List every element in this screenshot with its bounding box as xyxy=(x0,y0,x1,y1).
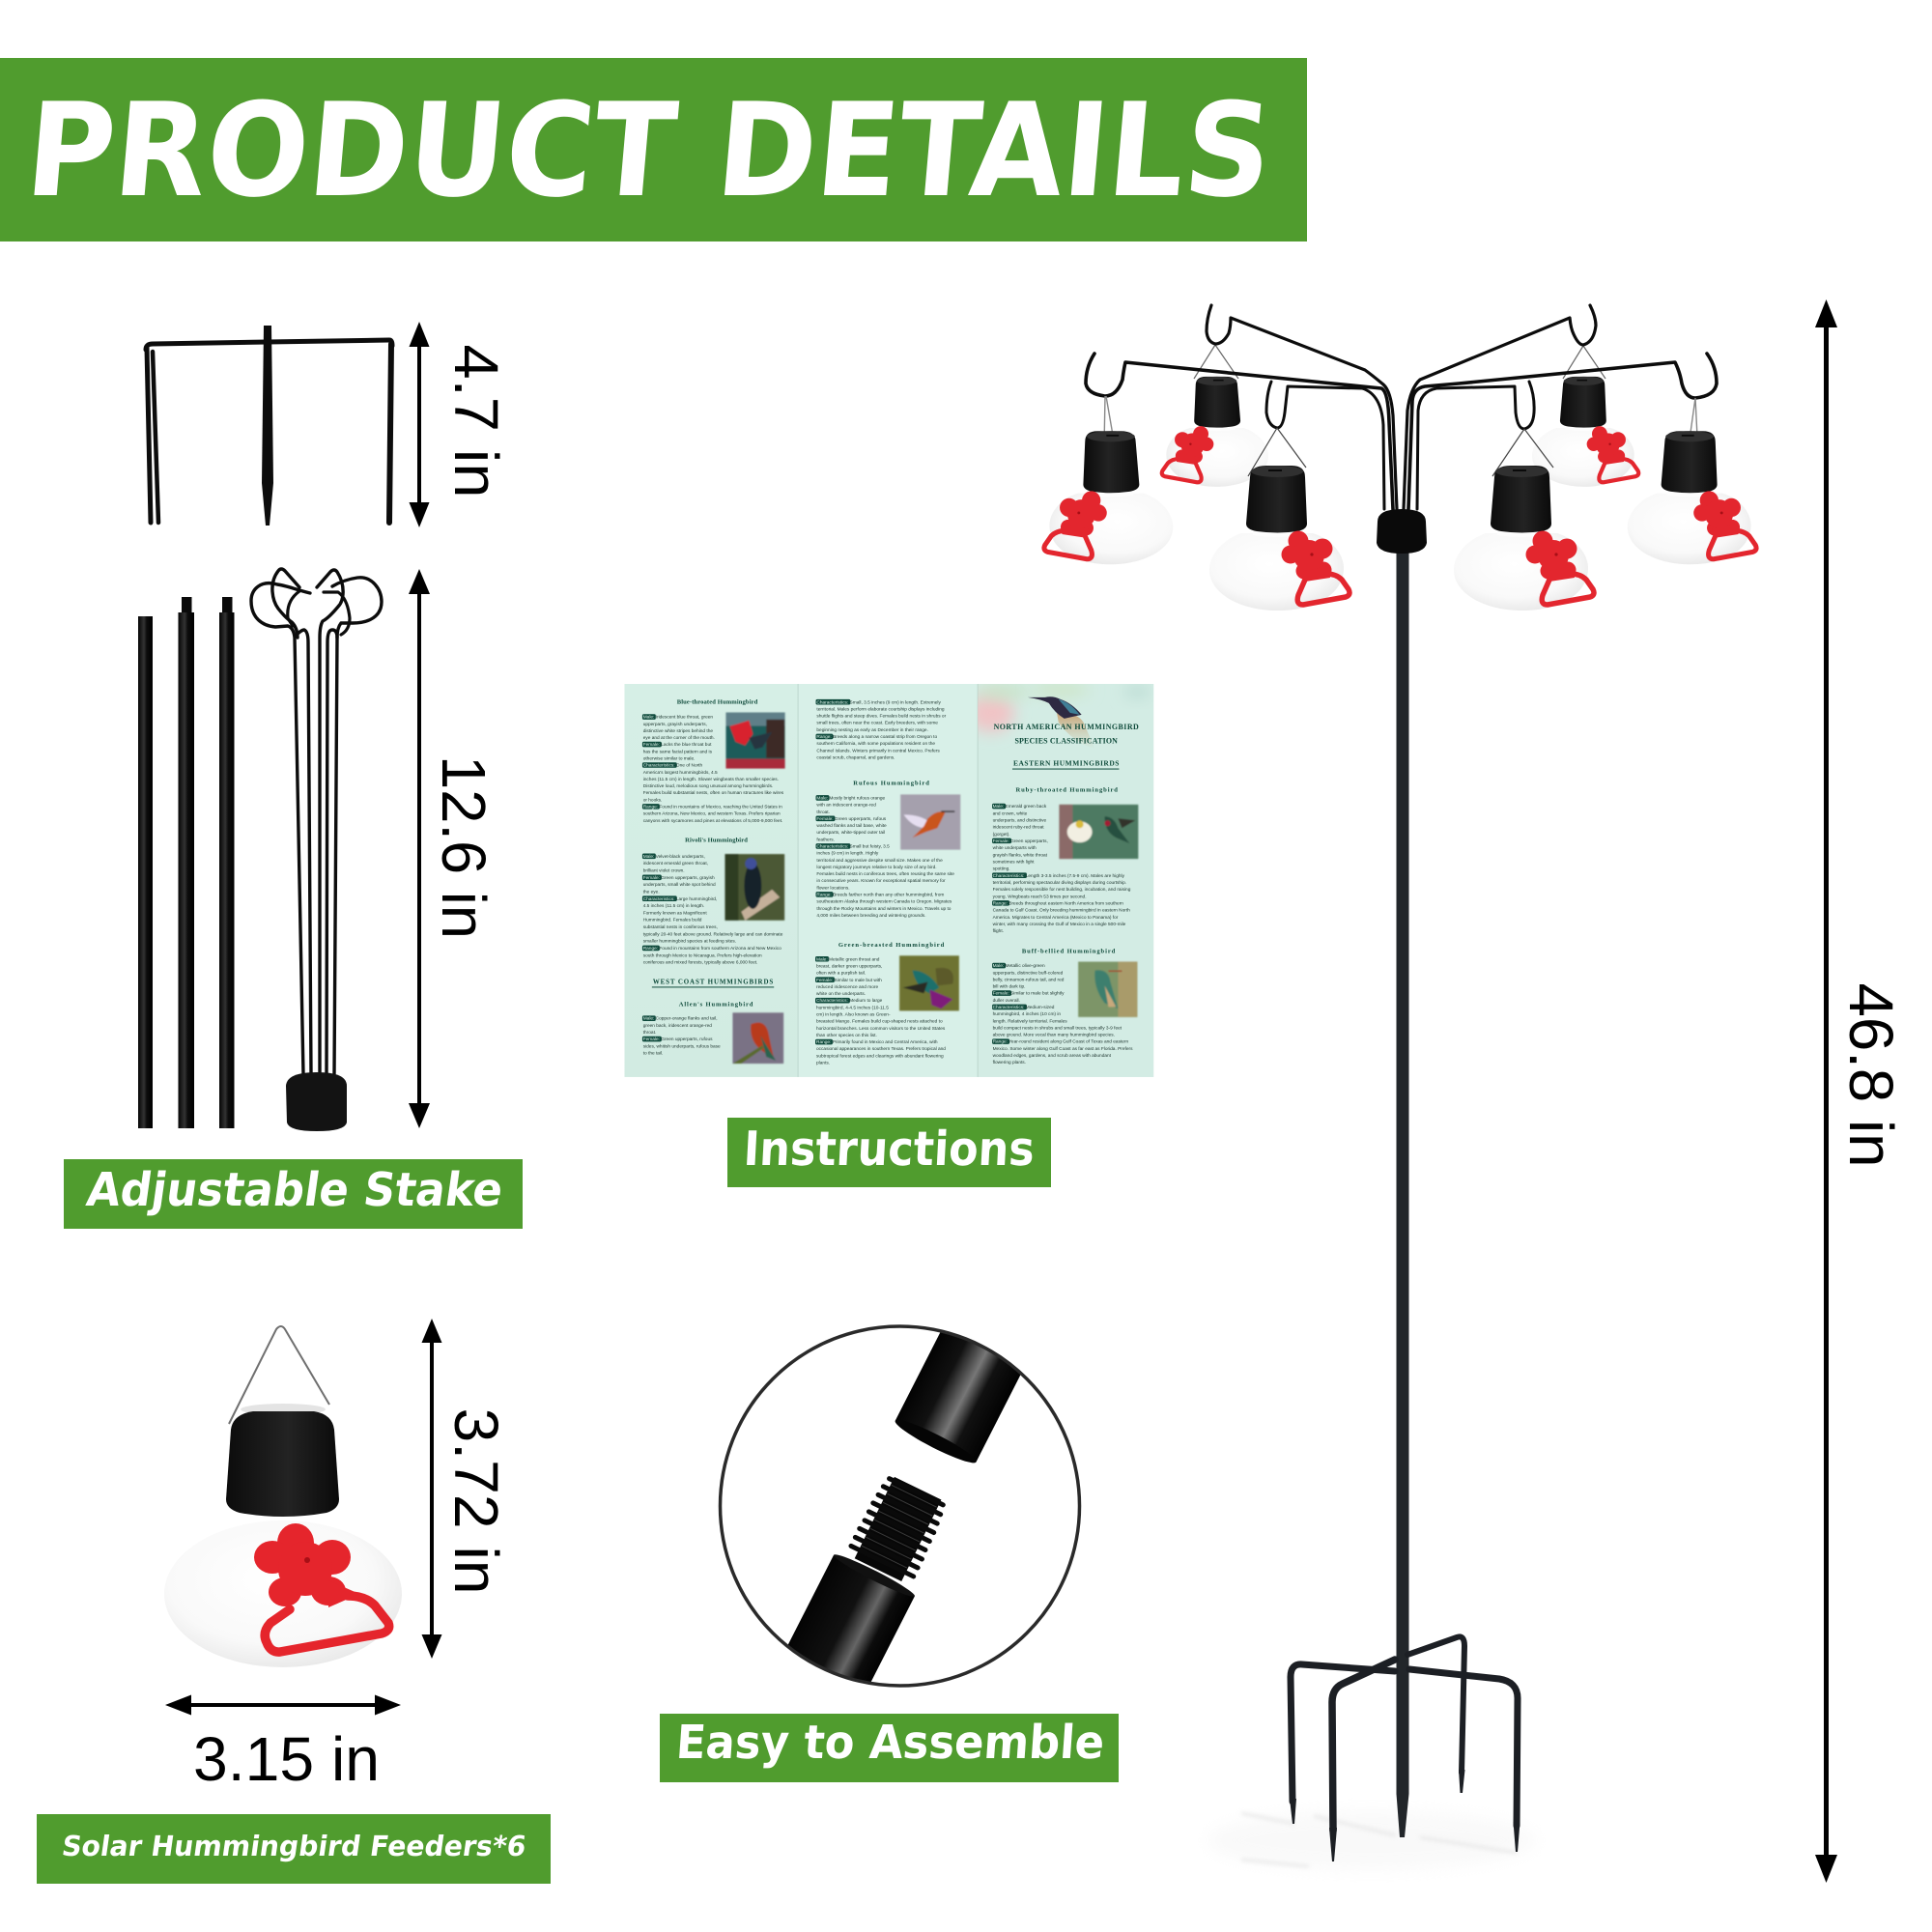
brochure body text: left panel: coniferous and mixed forests, typically above 6,000 feet. xyxy=(643,960,757,966)
brochure body text: right panel: spotting. xyxy=(993,867,1010,872)
brochure body text: middle panel: Female: Green upperparts, rufous xyxy=(816,817,886,822)
dimension label: 46.8 in: 46.8 in xyxy=(1836,983,1906,1167)
title banner: PRODUCT DETAILS xyxy=(20,74,1278,226)
brochure body text: left panel: Characteristics: Large hummingbird, xyxy=(643,897,717,902)
hanger wire xyxy=(229,1326,329,1424)
pronged base xyxy=(1290,1636,1520,1861)
brochure body text: right panel: hummingbird, 4 inches (10 cm) in xyxy=(993,1011,1061,1017)
brochure body text: right panel: Characteristics: Length 3-3.5 inches (7.5-9 cm). Males are highly xyxy=(993,874,1124,879)
brochure body text: right panel: America. Migrates to Central America (Mexico to Panama) for xyxy=(993,915,1119,921)
brochure body text: middle panel: Range: Primarily found in Mexico and Central America, with xyxy=(816,1040,938,1045)
brochure body text: left panel: Females build substantial nests, often on human structures like wires xyxy=(643,790,784,796)
dimension arrow: 3.72 in xyxy=(421,1319,442,1659)
brochure body text: left panel: Male: Copper-orange flanks and tail, xyxy=(643,1017,718,1022)
hub connector xyxy=(1377,509,1427,554)
brochure body text: right panel: woodland edges, gardens, and scrub areas with abundant xyxy=(993,1053,1112,1059)
brochure body text: middle panel: longest migratory journeys relative to body size of any bird. xyxy=(816,865,937,870)
brochure body text: middle panel: than other species on this list. xyxy=(816,1033,877,1038)
brochure body text: middle panel: territorial. Males perform elaborate courtship displays including xyxy=(816,706,945,712)
brochure body text: left panel: Female: Green upperparts, grayish xyxy=(643,876,715,881)
brochure body text: right panel: flowering plants. xyxy=(993,1060,1026,1065)
brochure body text: left panel: southern Arizona, New Mexico, and western Texas. Prefers riparian xyxy=(643,811,781,817)
brochure body text: middle panel: in consecutive years. Known for exceptional spatial memory for xyxy=(816,878,946,884)
hanger arms xyxy=(1086,305,1717,509)
brochure body text: left panel: iridescent emerald green throat, xyxy=(643,861,708,867)
feeding port flower xyxy=(254,1523,359,1607)
feeding port handle xyxy=(265,1596,389,1652)
brochure body text: middle panel: feathers. xyxy=(816,837,835,842)
brochure headings xyxy=(652,699,1139,1008)
brochure body text: left panel: Range: Found in mountains of Mexico, reaching the United States in xyxy=(643,805,782,810)
brochure body text: right panel: length. Relatively territorial. Females xyxy=(993,1018,1067,1024)
photo: Rivoli's hummingbird xyxy=(724,854,784,921)
brochure headings: Allen's Hummingbird xyxy=(679,1001,753,1008)
brochure headings: Buff-bellied Hummingbird xyxy=(1022,949,1116,955)
brochure body text: left panel: throat. xyxy=(643,1030,656,1036)
brochure headings: EASTERN HUMMINGBIRDS xyxy=(1013,759,1119,768)
label: Adjustable Stake: Adjustable Stake xyxy=(83,1163,506,1217)
feeder body xyxy=(164,1520,402,1667)
brochure body text: right panel: duller overall. xyxy=(993,998,1020,1004)
brochure body text: middle panel: Range: Breeds along a narrow coastal strip from Oregon to xyxy=(816,735,937,740)
brochure body text: left panel: or hooks. xyxy=(643,797,662,803)
brochure body text: right panel: and crown, white xyxy=(993,810,1028,816)
dimension label: 4.7 in: 4.7 in xyxy=(441,344,511,498)
photo: blue-throated hummingbird xyxy=(725,713,785,769)
brochure body text: right panel: upperparts, distinctive buff-colored xyxy=(993,970,1064,976)
brochure headings: Blue-throated Hummingbird xyxy=(677,699,758,706)
brochure body text: left panel: to the tail. xyxy=(643,1050,663,1056)
joined pole segments xyxy=(788,1333,1020,1682)
brochure body text: right panel: Mexico. Some winter along Gulf Coast as far east as Florida. Prefers xyxy=(993,1046,1133,1052)
dimension label: 3.15 in: 3.15 in xyxy=(193,1724,380,1794)
brochure body text: left panel: America's largest hummingbirds, 4.5 xyxy=(643,770,718,776)
brochure body text: right panel: belly, cinnamon-rufous tail, and red xyxy=(993,977,1065,982)
brochure body text: right panel: young. Wingbeats reach 53 times per second. xyxy=(993,894,1087,899)
brochure body text: middle panel: Female: Similar to male but with xyxy=(816,979,882,983)
brochure body text: right panel: sometimes with light xyxy=(993,859,1035,865)
brochure body text: middle panel: cm) in length. Also known as Green- xyxy=(816,1012,891,1018)
brochure body text: left panel: smaller hummingbird species at feeding sites. xyxy=(643,939,736,945)
brochure body text: middle panel: reduced iridescence and more xyxy=(816,984,878,990)
brochure body text: right panel: Female: Similar to male but slightly xyxy=(993,992,1064,997)
brochure body text: right panel: Characteristics: Medium-sized xyxy=(993,1006,1054,1010)
label: Solar Hummingbird Feeders*6 xyxy=(37,1814,551,1884)
brochure body text: left panel: underparts, small white spot behind xyxy=(643,882,716,888)
brochure body text: middle panel: Characteristics: Medium to large xyxy=(816,999,882,1004)
brochure body text: middle panel: throat. xyxy=(816,810,830,815)
brochure body text: right panel: Female: Green upperparts, xyxy=(993,839,1048,844)
brochure body text: middle panel: Range: Breeds farther north than any other hummingbird, from xyxy=(816,894,944,898)
brochure body text: middle panel: white on the underparts. xyxy=(816,991,866,997)
brochure body text: middle panel: inches (9 cm) in length. Highly xyxy=(816,851,879,857)
photo: Allen's hummingbird xyxy=(732,1012,783,1064)
brochure body text: middle panel: underparts, white-tipped outer tail xyxy=(816,830,885,836)
brochure body text: left panel: Range: Found in mountains from southern Arizona and New Mexico xyxy=(643,947,781,952)
brochure body text: middle panel: breast, darker green upperparts, xyxy=(816,964,882,970)
brochure body text: right panel xyxy=(993,804,1133,1065)
brochure body text: left panel: distinctive white stripes behind the xyxy=(643,728,713,734)
brochure body text: left panel: green back, iridescent orange-red xyxy=(643,1023,712,1029)
main pole xyxy=(1397,553,1408,1837)
brochure body text: left panel: canyons with sycamores and pines at elevations of 5,000-9,000 feet. xyxy=(643,818,782,824)
brochure headings: Rivoli's Hummingbird xyxy=(685,837,748,843)
brochure body text: middle panel: shuttle flights and steep dives. Females build nests in shrubs or xyxy=(816,714,947,720)
brochure body text: right panel: bill with dark tip. xyxy=(993,984,1025,990)
brochure body text: middle panel xyxy=(816,699,954,1066)
brochure body text: middle panel: often with a purplish tail. xyxy=(816,971,866,977)
brochure headings: Ruby-throated Hummingbird xyxy=(1015,786,1118,793)
brochure body text: left panel: upperparts, grayish underparts, xyxy=(643,722,707,727)
brochure body text: left panel: otherwise similar to male. xyxy=(643,755,695,761)
brochure body text: right panel: winter, with many crossing the Gulf of Mexico in a single 500-mile xyxy=(993,922,1126,927)
brochure body text: middle panel: beginning nesting as early as December in their range. xyxy=(816,727,928,733)
brochure body text: middle panel: breasted Mango. Females build cup-shaped nests attached to xyxy=(816,1019,943,1025)
brochure body text: middle panel: Male: Mostly bright rufous orange xyxy=(816,796,885,801)
brochure body text: left panel: the eye. xyxy=(643,889,660,895)
brochure body text: middle panel: hummingbird, 4-4.5 inches (10-11.5 xyxy=(816,1005,889,1010)
brochure body text: left panel: Female: Lacks the blue throat but xyxy=(643,743,711,748)
brochure body text: middle panel: southeastern Alaska through western Canada to Oregon. Migrates xyxy=(816,899,952,905)
brochure body text: left panel: typically 20-40 feet above ground. Relatively large and can dominate xyxy=(643,931,783,937)
brochure body text: right panel: white underparts with xyxy=(993,845,1037,851)
brochure body text: left panel: Characteristics: One of North xyxy=(643,764,702,769)
brochure body text: middle panel: Characteristics: Small but feisty, 3.5 xyxy=(816,845,890,850)
brochure body text: left panel: brilliant violet crown. xyxy=(643,868,685,874)
brochure body text: left panel: Female: Green upperparts, rufous xyxy=(643,1037,713,1042)
brochure body text: middle panel: southern California, with some populations resident on the xyxy=(816,741,935,747)
brochure panels xyxy=(624,684,1153,1077)
brochure body text: left panel: Formerly known as Magnificent xyxy=(643,910,707,916)
brochure body text: middle panel: plants. xyxy=(816,1061,830,1066)
dimension arrow: 4.7 in xyxy=(410,322,429,527)
brochure body text: middle panel: occasional appearances in southern Texas. Prefers tropical and xyxy=(816,1046,946,1052)
brochure body text: right panel: (gorget). xyxy=(993,832,1010,838)
brochure headings: NORTH AMERICAN HUMMINGBIRD xyxy=(994,723,1139,731)
brochure label badges xyxy=(642,699,1027,1044)
brochure body text: right panel: Canada to Gulf Coast. Only breeding hummingbird in eastern North xyxy=(993,908,1130,914)
dimension arrow: 46.8 in xyxy=(1815,299,1837,1883)
brochure body text: left panel: south through Mexico to Nicaragua. Prefers high-elevation xyxy=(643,952,762,958)
brochure body text: left panel: substantial nests in coniferous trees, xyxy=(643,924,718,930)
dimension arrow: 12.6 in xyxy=(409,569,430,1128)
brochure body text: right panel: build compact nests in shrubs and small trees, typically 3-9 feet xyxy=(993,1025,1122,1031)
brochure body text: right panel: territorial, performing spectacular diving displays during courtship. xyxy=(993,880,1126,886)
brochure body text: left panel: Male: Velvet-black underparts, xyxy=(643,855,705,860)
brochure body text: right panel: grayish flanks, white throat xyxy=(993,852,1048,858)
brochure body text: left panel: 4.5 inches (11.5 cm) in length. xyxy=(643,903,704,909)
dimension label: 12.6 in: 12.6 in xyxy=(429,755,498,939)
brochure body text: right panel: Male: Emerald green back xyxy=(993,805,1046,810)
brochure cover art xyxy=(978,684,1148,745)
brochure body text: right panel: underparts, and distinctive xyxy=(993,817,1047,823)
brochure body text: middle panel: small trees, often near the coast. Early breeders, with some xyxy=(816,721,938,726)
brochure body text: middle panel: flower locations. xyxy=(816,885,850,891)
brochure body text: middle panel: washed flanks and tail base, white xyxy=(816,823,887,829)
dimension label: 3.72 in: 3.72 in xyxy=(441,1408,511,1594)
brochure body text: right panel: above ground. More vocal than many hummingbird species. xyxy=(993,1033,1115,1038)
hanger arms with hub xyxy=(251,569,382,1131)
brochure body text: left panel: Male: Iridescent blue throat, green xyxy=(643,716,713,721)
brochure headings: Green-breasted Hummingbird xyxy=(838,942,945,949)
stake shadow xyxy=(1208,1811,1536,1869)
brochure body text: right panel: Range: Breeds throughout eastern North America from southern xyxy=(993,901,1123,906)
brochure body text: middle panel: coastal scrub, chaparral, and gardens. xyxy=(816,754,895,760)
solar cap xyxy=(226,1404,339,1517)
brochure body text: middle panel: horizontal branches. Less common visitors to the United States xyxy=(816,1026,946,1032)
assembly detail circle xyxy=(721,1300,1080,1708)
brochure body text: left panel: eye and at the corner of the mouth. xyxy=(643,735,715,741)
brochure body text: middle panel: 4,000 miles between breeding and wintering grounds. xyxy=(816,913,926,919)
front feeders xyxy=(1044,396,1756,611)
ground stake prongs xyxy=(146,326,392,526)
brochure body text: middle panel: Females build nests in coniferous trees, often reusing the same site xyxy=(816,871,954,877)
label: Easy to Assemble: Easy to Assemble xyxy=(674,1716,1106,1770)
label: Solar Hummingbird Feeders*6: Solar Hummingbird Feeders*6 xyxy=(60,1830,528,1862)
brochure body text: middle panel: through the Rocky Mountains and winters in Mexico. Travels up to xyxy=(816,906,952,912)
brochure body text: middle panel: subtropical forest edges and clearings with abundant flowering xyxy=(816,1053,944,1059)
circle outline xyxy=(721,1326,1080,1686)
back feeders xyxy=(1162,345,1638,487)
photo: rufous hummingbird xyxy=(900,794,960,850)
brochure body text: right panel: iridescent ruby-red throat xyxy=(993,825,1044,831)
brochure body text: right panel: Range: Year-round resident along Gulf Coast of Texas and eastern xyxy=(993,1040,1128,1045)
brochure headings: SPECIES CLASSIFICATION xyxy=(1014,737,1118,746)
photo: ruby-throated hummingbird xyxy=(1059,805,1138,859)
feeder detail xyxy=(164,1326,402,1667)
photo: green-breasted hummingbird xyxy=(899,955,959,1010)
brochure headings: Rufous Hummingbird xyxy=(853,780,929,786)
brochure body text: right panel: flight. xyxy=(993,928,1004,934)
assembled pole with feeders xyxy=(1044,305,1756,1869)
photo: buff-bellied hummingbird xyxy=(1078,962,1137,1017)
pole segments xyxy=(138,597,234,1128)
brochure body text: middle panel: Characteristics: Small, 3.5 inches (9 cm) in length. Extremely xyxy=(816,700,941,705)
brochure body text: middle panel: Male: Metallic green throat and xyxy=(816,957,879,962)
brochure body text: left panel: has the same facial pattern and is xyxy=(643,749,713,754)
dimension arrow: 3.15 in xyxy=(165,1694,401,1716)
brochure body text: left panel: Distinctive loud, melodious song unusual among hummingbirds. xyxy=(643,783,773,789)
instructions brochure xyxy=(624,683,1153,1077)
brochure body text: middle panel: territorial and aggressive despite small size. Makes one of the xyxy=(816,858,943,864)
label: Instructions: Instructions xyxy=(742,1121,1036,1177)
brochure body text: left panel xyxy=(643,715,784,1056)
brochure body text: left panel: Hummingbird. Females build xyxy=(643,918,702,923)
brochure body text: middle panel: with an iridescent orange-red xyxy=(816,803,876,809)
brochure headings: WEST COAST HUMMINGBIRDS xyxy=(653,978,773,985)
brochure body text: left panel: sides, whitish underparts, rufous base xyxy=(643,1043,721,1049)
brochure body text: right panel: Females solely responsible for nest building, incubation, and raising xyxy=(993,887,1131,893)
brochure body text: left panel: inches (11.5 cm) in length. Slower wingbeats than smaller species. xyxy=(643,777,779,782)
brochure body text: right panel: Male: Metallic olive-green xyxy=(993,964,1045,969)
brochure body text: middle panel: Channel Islands. Winters primarily in central Mexico. Prefers xyxy=(816,748,940,753)
